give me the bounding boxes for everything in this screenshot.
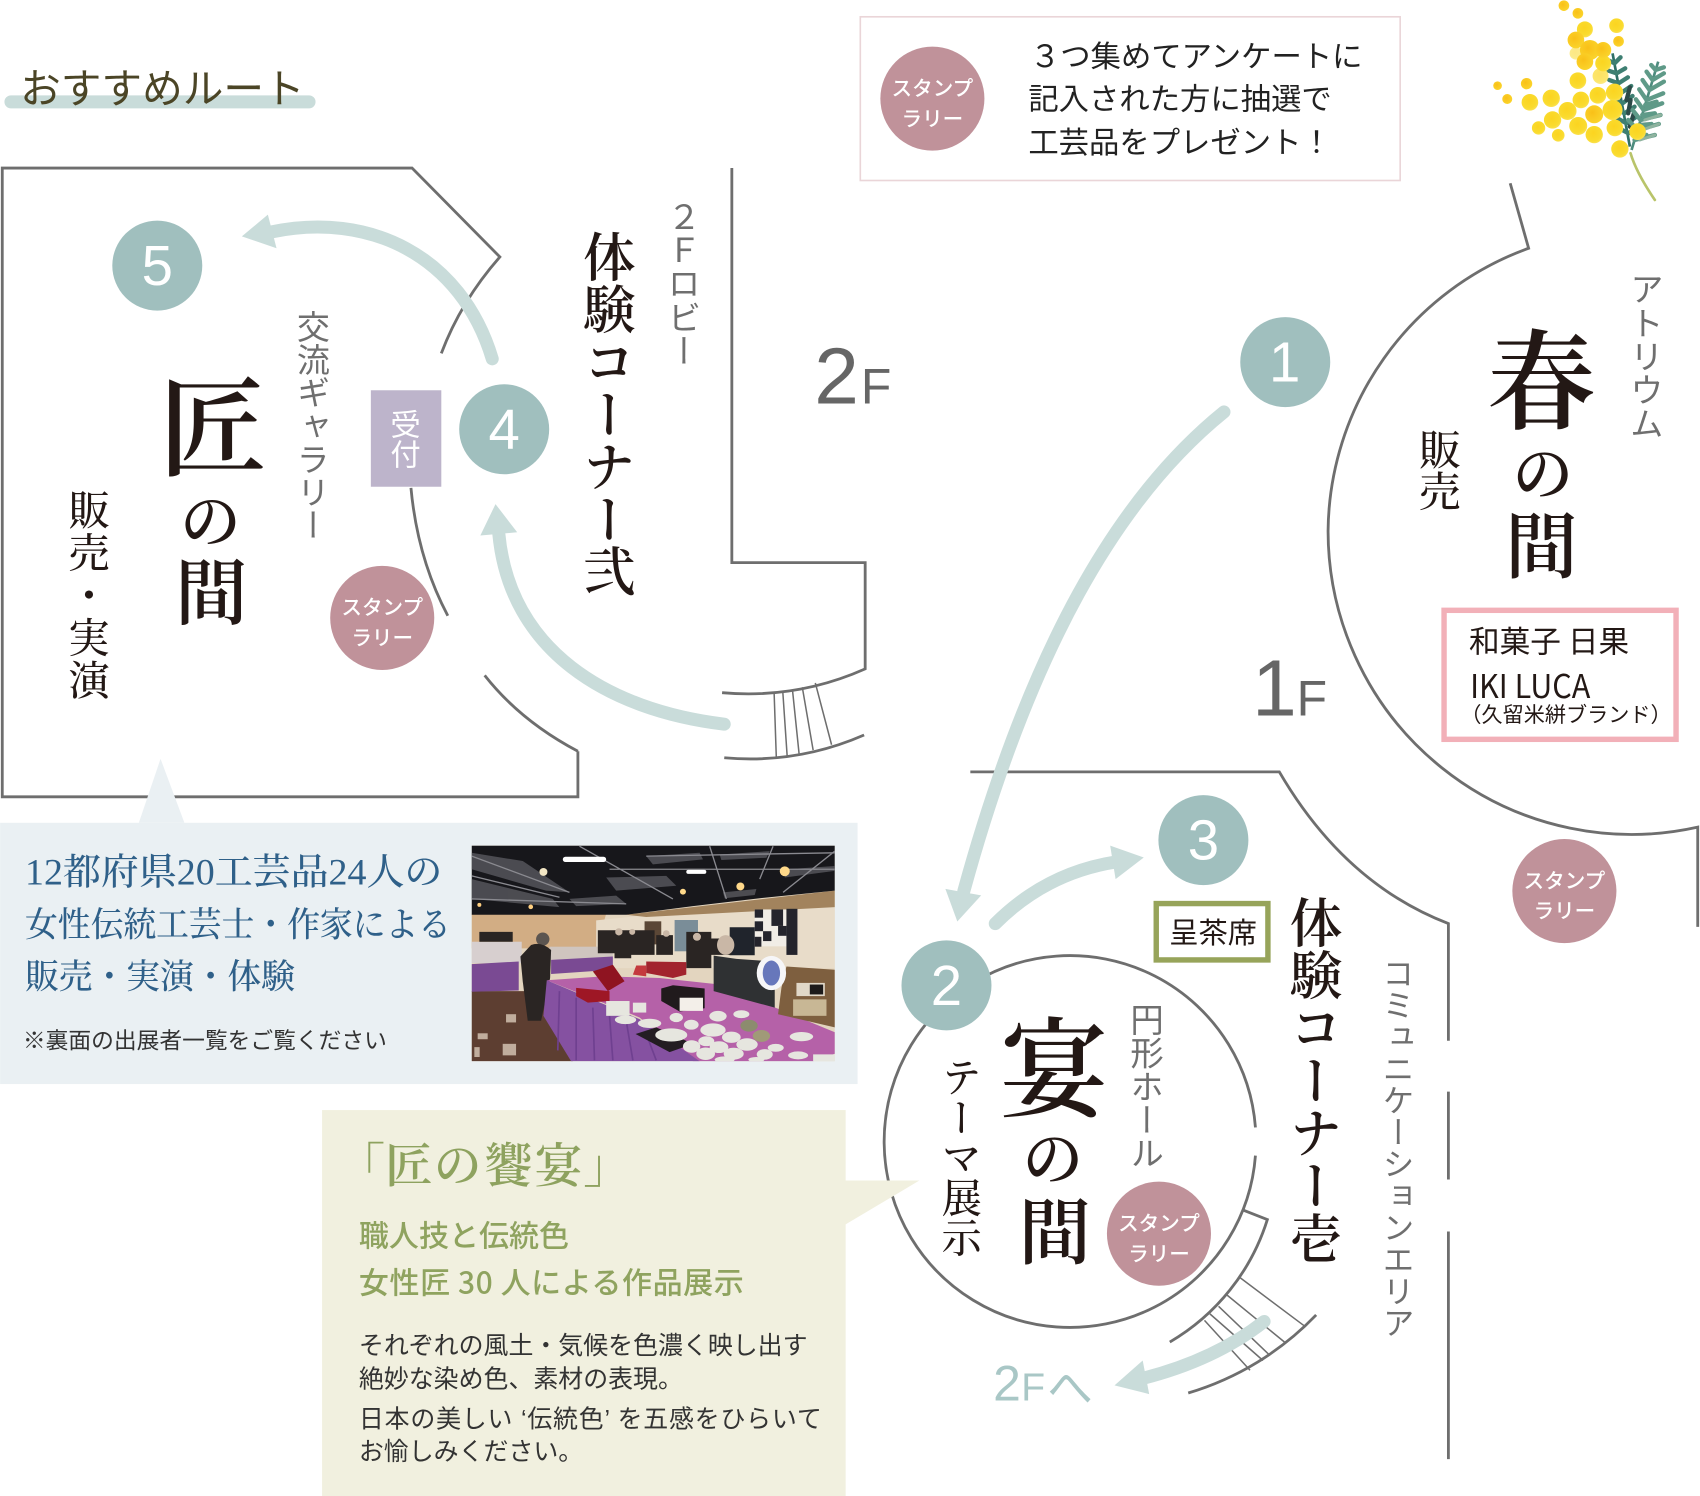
floor plan walls: 1F atrium <box>1328 183 1698 927</box>
floor plan walls: round hall and stairs <box>884 956 1316 1393</box>
label: 2Fロビー: ２Ｆロビー <box>660 199 709 367</box>
label: 円形ホール: 円形ホール <box>1123 1003 1172 1170</box>
route marker 4 <box>459 384 549 474</box>
label: 2Fへ <box>993 1352 1093 1418</box>
title: おすすめルート: おすすめルート <box>20 56 305 115</box>
exhibition summary headline: 女性伝統工芸士・作家による <box>25 906 451 945</box>
label: 体験コーナー弐: 体験コーナー弐 <box>572 230 647 597</box>
route marker 1: 1 <box>1269 331 1300 394</box>
notice text <box>1028 32 1363 162</box>
theme exhibition heading: 「 <box>337 1142 385 1194</box>
room name: 宴の間: 宴 <box>1000 984 1108 1140</box>
callout: 和菓子 日果 IKI LUCA <box>1444 610 1676 739</box>
label: 販売: 販売 <box>1410 428 1470 512</box>
stamp rally badge: round hall: ラリー <box>1128 1237 1190 1267</box>
panel: theme exhibition 匠の饗宴 <box>322 1110 919 1496</box>
floor label: 1F <box>1252 642 1327 732</box>
label: テーマ展示: テーマ展示 <box>933 1057 990 1258</box>
label: 2Fへ: 2 <box>993 1356 1021 1412</box>
notice box: stamp rally prize <box>860 17 1400 180</box>
label: アトリウム: アトリウム <box>1622 272 1671 440</box>
stamp rally badge: gallery: ラリー <box>351 621 413 651</box>
arrow: 2F stairs to 4 <box>480 504 724 724</box>
room name: 宴の間: 間 <box>1019 1175 1091 1280</box>
stamp rally badge: round hall <box>1107 1182 1211 1286</box>
floor plan walls: 1F communication area <box>970 772 1448 1459</box>
stamp rally badge: round hall: スタンプ <box>1118 1206 1200 1236</box>
photo: exhibition hall <box>472 846 835 1062</box>
panel: exhibition summary <box>0 759 858 1084</box>
exhibition summary headline: 販売・実演・体験 <box>25 958 295 997</box>
label: 交流ギャラリー: 交流ギャラリー <box>289 310 337 541</box>
room name: 春の間: 春 <box>1487 297 1596 453</box>
stamp rally badge: gallery: スタンプ <box>341 591 423 621</box>
reception desk: 受付 <box>384 408 428 470</box>
theme exhibition description: お愉しみください。 <box>359 1438 583 1466</box>
route marker 3: 3 <box>1188 809 1219 872</box>
arrow: 2 to 3 <box>995 846 1144 924</box>
room name: 春の間 <box>1487 297 1596 593</box>
route marker 2 <box>901 940 991 1030</box>
theme exhibition heading: 饗 <box>485 1141 532 1194</box>
theme exhibition heading <box>337 1141 631 1194</box>
theme exhibition heading: の <box>434 1142 481 1194</box>
illustration: mimosa sprig <box>1493 0 1666 202</box>
room name: 匠の間: の <box>180 474 241 561</box>
callout: 和菓子 日果 IKI LUCA: （久留米絣ブランド） <box>1460 698 1672 729</box>
theme exhibition subheading <box>359 1212 744 1302</box>
arrow: 4 to 5 <box>242 215 492 359</box>
notice text: 工芸品をプレゼント！ <box>1028 118 1332 162</box>
stamp rally badge: atrium <box>1512 839 1616 943</box>
floor plan walls: 2F lobby and stairs <box>722 168 865 759</box>
label: 販売・実演: 販売・実演 <box>59 489 118 701</box>
reception desk <box>371 390 441 487</box>
theme exhibition heading: 匠 <box>385 1142 433 1194</box>
route marker 5 <box>112 221 202 311</box>
floor label: 1F: F <box>1297 670 1327 726</box>
floor label: 1F: 1 <box>1252 642 1297 732</box>
theme exhibition description: 日本の美しい ‘伝統色’ を五感をひらいて <box>359 1406 822 1434</box>
room name: 宴の間 <box>1000 984 1108 1280</box>
route marker 3 <box>1158 795 1248 885</box>
notice text: ３つ集めてアンケートに <box>1030 32 1363 76</box>
floor label: 2F <box>814 330 891 420</box>
theme exhibition subheading: 職人技と伝統色 <box>359 1212 569 1256</box>
theme exhibition description <box>359 1332 822 1466</box>
theme exhibition subheading: 女性匠 30 人による作品展示 <box>359 1258 744 1302</box>
label: 体験コーナー壱: 体験コーナー壱 <box>1278 895 1354 1264</box>
room name: 春の間: の <box>1512 426 1573 513</box>
room name: 宴の間: の <box>1022 1112 1083 1199</box>
label: コミュニケーションエリア: コミュニケーションエリア <box>1376 957 1422 1338</box>
callout: 和菓子 日果 IKI LUCA: IKI LUCA <box>1470 661 1591 708</box>
room name: 春の間: 間 <box>1505 488 1578 593</box>
stamp rally badge: notice <box>880 47 984 151</box>
exhibition summary headline <box>25 852 451 997</box>
arrow: stairs to 2F <box>1115 1321 1264 1394</box>
stamp rally badge: gallery <box>330 566 434 670</box>
route marker 2: 2 <box>931 954 962 1017</box>
theme exhibition description: 絶妙な染め色、素材の表現。 <box>359 1366 683 1394</box>
room name: 匠の間: 匠 <box>158 343 267 499</box>
stamp rally badge: notice: ラリー <box>902 102 963 132</box>
floor label: 2F: F <box>861 358 891 414</box>
exhibition summary headline: 12都府県20工芸品24人の <box>25 852 442 893</box>
stamp rally badge: atrium: ラリー <box>1534 894 1595 924</box>
theme exhibition heading: 宴 <box>535 1142 583 1194</box>
notice text: 記入された方に抽選で <box>1028 74 1332 118</box>
theme exhibition description: それぞれの風土・気候を色濃く映し出す <box>359 1332 808 1360</box>
tea seating label: 呈茶席: 呈茶席 <box>1169 910 1257 952</box>
arrow: 1 to 2 <box>945 412 1224 921</box>
route marker 4: 4 <box>489 398 520 461</box>
stamp rally badge: notice: スタンプ <box>892 71 974 101</box>
callout: 和菓子 日果 IKI LUCA: 和菓子 日果 <box>1469 617 1629 662</box>
label: 2Fへ: F <box>1021 1367 1045 1410</box>
floor plan walls: 2F gallery room <box>2 168 578 797</box>
exhibition summary note: ※裏面の出展者一覧をご覧ください <box>23 1022 387 1055</box>
room name: 匠の間 <box>158 343 267 640</box>
tea seating label: 呈茶席 <box>1156 904 1268 960</box>
route marker 5: 5 <box>142 234 173 297</box>
stamp rally badge: atrium: スタンプ <box>1524 864 1606 894</box>
room name: 匠の間: 間 <box>175 535 248 640</box>
label: 2Fへ: へ <box>1047 1352 1093 1418</box>
theme exhibition heading: 」 <box>583 1142 631 1194</box>
floor label: 2F: 2 <box>814 330 859 420</box>
route marker 1 <box>1240 317 1330 407</box>
